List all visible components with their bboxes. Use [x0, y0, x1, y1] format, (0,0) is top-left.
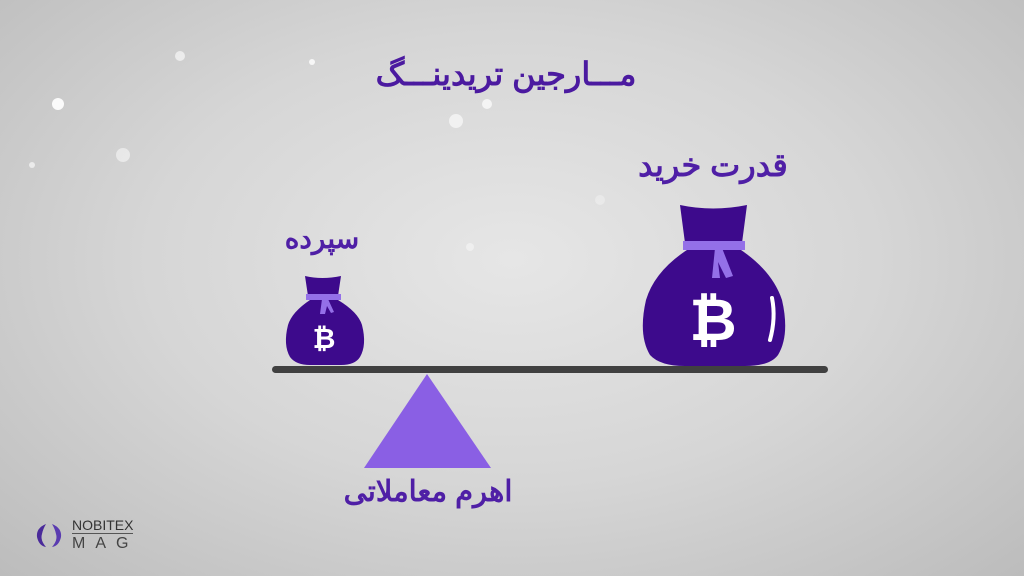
- beam: [272, 366, 828, 373]
- logo: MAG: [72, 535, 138, 552]
- title: مـــارجین تریدینـــگ: [376, 56, 636, 92]
- icon: large bitcoin bag: [643, 205, 785, 366]
- icon: large bitcoin bag: ₿: [689, 288, 737, 353]
- icon: small bitcoin bag: ₿: [313, 323, 335, 354]
- label: buying power: قدرت خرید: [638, 147, 788, 183]
- label: leverage: اهرم معاملاتی: [344, 476, 512, 508]
- logo: [36, 517, 138, 552]
- fulcrum triangle: [364, 374, 491, 468]
- logo: NOBITEX: [72, 517, 133, 533]
- label: deposit: سپرده: [285, 223, 359, 254]
- icon: small bitcoin bag: [286, 276, 364, 365]
